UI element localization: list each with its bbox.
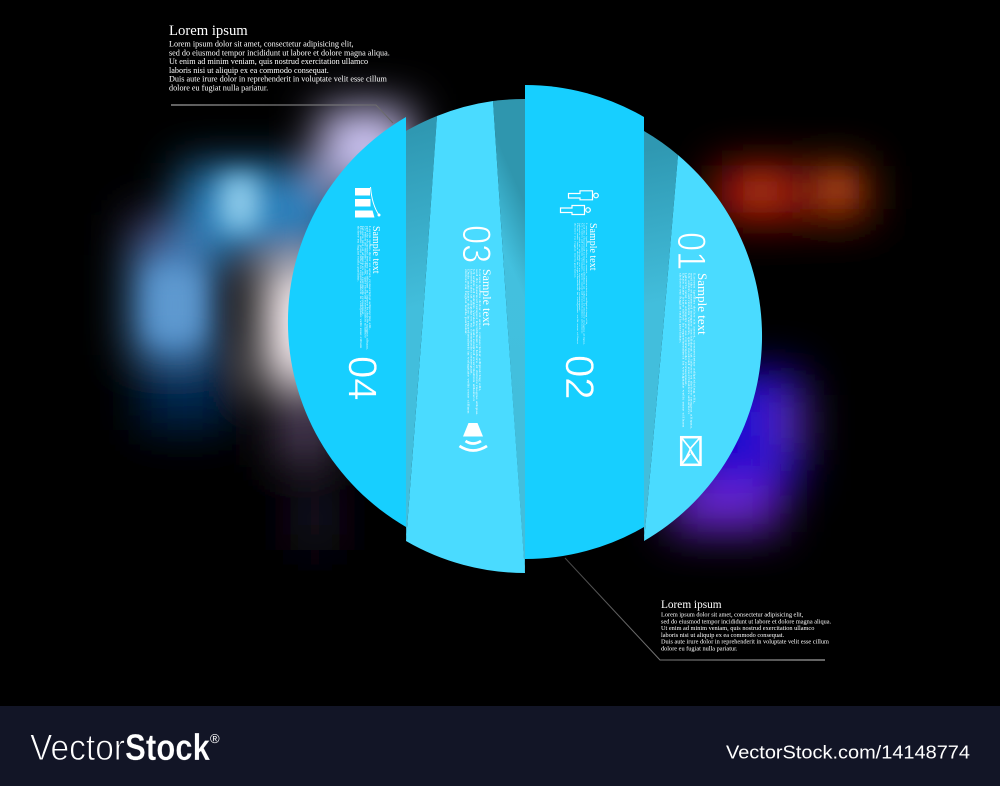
text block: strip 04: dolore eu fugiat nulla pariatur.	[357, 226, 359, 282]
text block: strip 01: dolore eu fugiat nulla pariatur.	[678, 273, 682, 343]
footer url: VectorStock.com/14148774	[726, 742, 970, 762]
text block: strip 02: dolore eu fugiat nulla pariatur.	[574, 223, 576, 278]
footer bar	[0, 706, 1000, 786]
bottom callout body: Ut enim ad minim veniam, quis nostrud exercitation ullamco	[661, 625, 814, 632]
logo: Stock	[125, 727, 210, 768]
text block: strip 01: Sample text	[695, 273, 710, 335]
text block: strip 04: Duis aute irure dolor in reprehenderit in voluptate velit esse cillum	[359, 226, 362, 348]
leader line: bottom	[565, 558, 825, 660]
text block: strip 03: laboris nisi ut aliquip ex ea commodo consequat.	[470, 269, 473, 375]
text block: strip 03: dolore eu fugiat nulla pariatur.	[464, 269, 468, 335]
number 01: 01	[669, 232, 714, 270]
leader line: top	[171, 105, 393, 123]
text block: strip 01: Duis aute irure dolor in reprehenderit in voluptate velit esse cillum	[681, 273, 684, 428]
text block: strip 01: Lorem ipsum dolor sit amet, consectetur adipisicing elit,	[692, 273, 696, 404]
text block: strip 02: Ut enim ad minim veniam, quis nostrud exercitation ullamco	[580, 223, 583, 334]
text block: strip 04: sed do eiusmod tempor incididunt ut labore et dolore magna aliqua.	[366, 226, 369, 350]
text block: strip 04	[357, 226, 381, 350]
icon: bottles	[560, 191, 598, 214]
panel: strip 02	[525, 85, 644, 559]
bottom callout body: laboris nisi ut aliquip ex ea commodo consequat.	[661, 632, 785, 639]
text block: strip 01: Ut enim ad minim veniam, quis nostrud exercitation ullamco	[687, 273, 690, 415]
bottom callout body: sed do eiusmod tempor incididunt ut labore et dolore magna aliqua.	[661, 618, 832, 625]
bottom callout body: dolore eu fugiat nulla pariatur.	[661, 645, 738, 652]
bottom callout heading: Lorem ipsum	[661, 599, 722, 611]
strip 01 shadow	[644, 131, 678, 541]
strip 01 face	[644, 155, 762, 541]
panel: strip 01	[644, 131, 762, 541]
text block: strip 03: Lorem ipsum dolor sit amet, consectetur adipisicing elit,	[477, 269, 482, 391]
top callout heading: Lorem ipsum	[169, 23, 248, 39]
text block: strip 03: Sample text	[480, 269, 494, 327]
text block: strip 02: sed do eiusmod tempor incididunt ut labore et dolore magna aliqua.	[583, 223, 586, 346]
top callout body: Lorem ipsum dolor sit amet, consectetur adipisicing elit,	[169, 40, 354, 48]
panel: strip 03	[406, 99, 525, 573]
text block: strip 03: Duis aute irure dolor in reprehenderit in voluptate velit esse cillum	[467, 269, 470, 414]
top callout body: sed do eiusmod tempor incididunt ut labore et dolore magna aliqua.	[169, 48, 390, 57]
text block: strip 02: Lorem ipsum dolor sit amet, consectetur adipisicing elit,	[585, 223, 588, 325]
top callout body: laboris nisi ut aliquip ex ea commodo consequat.	[169, 66, 329, 75]
number 02: 02	[557, 355, 601, 400]
top callout body: dolore eu fugiat nulla pariatur.	[169, 83, 268, 92]
text block: strip 01	[678, 273, 710, 429]
bottom callout body	[661, 612, 832, 652]
text block: strip 03	[464, 269, 494, 415]
logo	[30, 727, 220, 768]
text block: strip 01: laboris nisi ut aliquip ex ea commodo consequat.	[684, 273, 687, 386]
text block: strip 03: sed do eiusmod tempor incididunt ut labore et dolore magna aliqua.	[475, 269, 479, 415]
logo: ®	[210, 731, 220, 746]
text block: strip 04: Sample text	[370, 226, 381, 274]
icon: bar list	[355, 187, 380, 218]
strip 03 face	[406, 101, 525, 573]
top callout body: Duis aute irure dolor in reprehenderit in voluptate velit esse cillum	[169, 75, 387, 84]
strip 03 right shadow	[493, 99, 525, 573]
text block: top callout	[169, 23, 390, 92]
top callout body: Ut enim ad minim veniam, quis nostrud exercitation ullamco	[169, 57, 368, 66]
text block: strip 04: Ut enim ad minim veniam, quis nostrud exercitation ullamco	[363, 226, 366, 338]
top callout body	[169, 40, 390, 92]
strip 03 left shadow	[406, 116, 437, 541]
bottom callout body: Lorem ipsum dolor sit amet, consectetur adipisicing elit,	[661, 612, 804, 618]
text block: strip 01: sed do eiusmod tempor incididunt ut labore et dolore magna aliqua.	[689, 273, 693, 429]
text block: strip 02: laboris nisi ut aliquip ex ea commodo consequat.	[578, 223, 581, 312]
text block: bottom callout	[661, 599, 832, 652]
bottom callout body: Duis aute irure dolor in reprehenderit in voluptate velit esse cillum	[661, 639, 829, 646]
text block: strip 04: Lorem ipsum dolor sit amet, consectetur adipisicing elit,	[368, 226, 371, 330]
text block: strip 03: Ut enim ad minim veniam, quis nostrud exercitation ullamco	[472, 269, 476, 402]
text block: strip 02	[574, 223, 598, 346]
number 04: 04	[340, 356, 384, 400]
icon: envelope	[681, 437, 700, 465]
panel: strip 04	[288, 117, 406, 527]
number 03: 03	[454, 225, 499, 263]
logo: Vector	[30, 727, 125, 768]
icon: bell	[460, 423, 487, 450]
text block: strip 04: laboris nisi ut aliquip ex ea commodo consequat.	[361, 226, 364, 316]
text block: strip 02: Sample text	[587, 223, 598, 271]
text block: strip 02: Duis aute irure dolor in reprehenderit in voluptate velit esse cillum	[576, 223, 579, 344]
